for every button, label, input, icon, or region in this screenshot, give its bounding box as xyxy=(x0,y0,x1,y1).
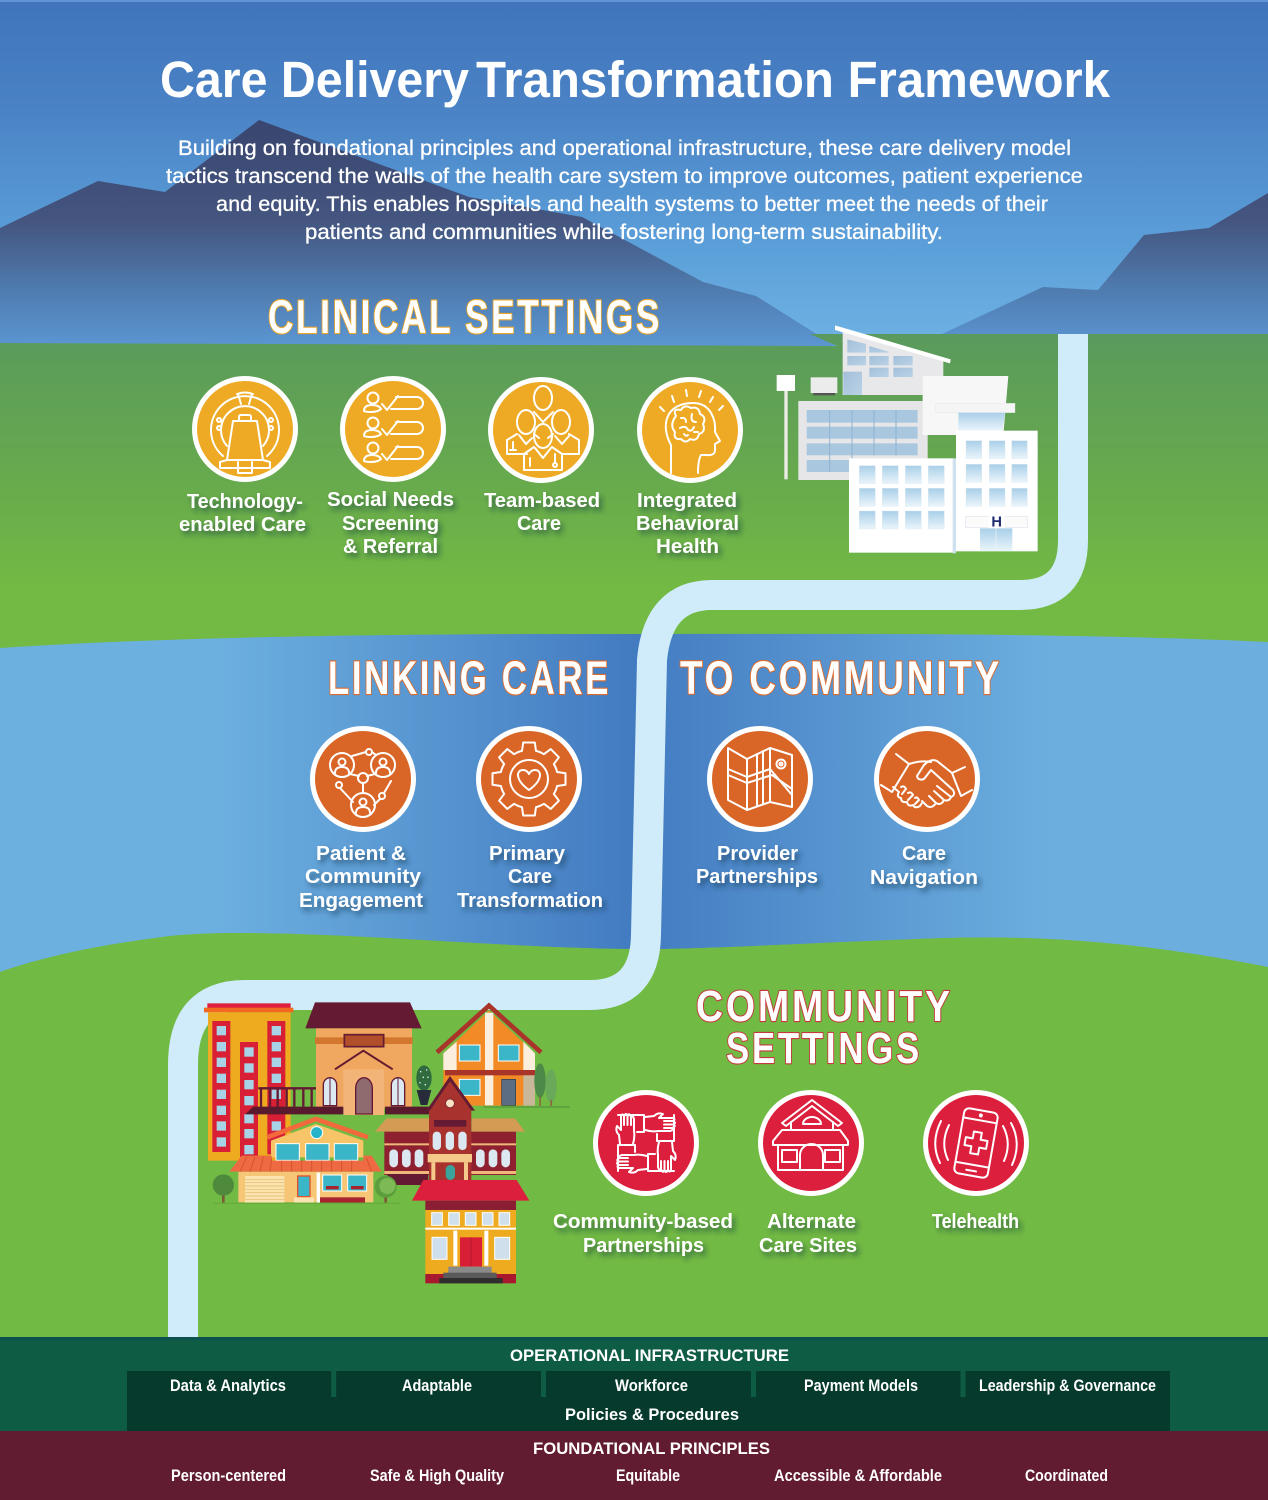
item: alternate care sites: Care Sites xyxy=(759,1235,857,1257)
item: patient and community engagement xyxy=(299,728,423,912)
item: social needs screening and referral: & Referral xyxy=(343,536,438,558)
item: alternate care sites xyxy=(759,1092,862,1257)
item: provider partnerships xyxy=(696,728,818,888)
panel: foundational principles xyxy=(0,1431,1268,1500)
panel: community settings items xyxy=(553,1092,1026,1257)
right mountains xyxy=(942,193,1268,334)
intro paragraph: tactics transcend the walls of the health care system to improve outcomes, patient experience xyxy=(166,165,1083,188)
item: integrated behavioral health: Behavioral xyxy=(636,513,739,535)
item: community-based partnerships: Partnerships xyxy=(583,1235,704,1257)
panel: linking care to community items xyxy=(299,728,978,912)
item: technology-enabled care: Technology- xyxy=(187,491,303,513)
title: Care Delivery xyxy=(160,51,470,108)
heading: community settings xyxy=(696,982,953,1073)
item: telehealth: Telehealth xyxy=(932,1211,1019,1233)
panel: operational infrastructure: Leadership & Governance xyxy=(979,1376,1156,1395)
item: patient and community engagement: Patient & xyxy=(316,843,406,865)
panel: foundational principles: Person-centered xyxy=(171,1466,286,1485)
title: Transformation Framework xyxy=(476,51,1111,108)
winding path xyxy=(183,334,1073,1338)
title xyxy=(160,51,1111,108)
item: patient and community engagement: Community xyxy=(305,866,422,888)
item: community-based partnerships: Community-based xyxy=(553,1211,733,1233)
upper green ground xyxy=(0,334,1268,660)
heading: community settings: SETTINGS xyxy=(726,1024,922,1073)
sky background xyxy=(0,0,1268,350)
panel: foundational principles: FOUNDATIONAL PRINCIPLES xyxy=(533,1439,770,1458)
item: integrated behavioral health: Integrated xyxy=(637,490,737,512)
left mountains xyxy=(0,120,837,347)
item: team-based care: Care xyxy=(517,513,561,535)
intro paragraph: and equity. This enables hospitals and health systems to better meet the needs of their xyxy=(216,193,1048,216)
blue river band xyxy=(0,634,1268,972)
item: primary care transformation: Primary xyxy=(489,843,566,865)
heading: linking care: LINKING CARE xyxy=(328,651,611,704)
panel: foundational principles: Safe & High Quality xyxy=(370,1466,504,1485)
item: community-based partnerships xyxy=(553,1092,733,1257)
item: primary care transformation: Transformation xyxy=(457,890,603,912)
item: provider partnerships: Partnerships xyxy=(696,866,818,888)
item: integrated behavioral health xyxy=(636,380,740,558)
item: integrated behavioral health: Health xyxy=(656,536,719,558)
item: social needs screening and referral: Social Needs xyxy=(327,489,454,511)
item: care navigation xyxy=(870,728,978,889)
panel: foundational principles: Accessible & Affordable xyxy=(774,1466,942,1485)
item: alternate care sites: Alternate xyxy=(767,1211,856,1233)
panel: foundational principles: Coordinated xyxy=(1025,1466,1108,1485)
item: care navigation: Navigation xyxy=(870,867,978,889)
heading: community settings: COMMUNITY xyxy=(696,982,953,1031)
intro paragraph: Building on foundational principles and operational infrastructure, these care delivery model xyxy=(178,137,1071,160)
item: social needs screening and referral: Screening xyxy=(342,513,439,535)
panel: operational infrastructure: Adaptable xyxy=(402,1376,472,1395)
panel: operational infrastructure: Workforce xyxy=(615,1376,688,1395)
item: technology-enabled care: enabled Care xyxy=(179,514,306,536)
item: social needs screening and referral xyxy=(327,378,454,558)
item: team-based care: Team-based xyxy=(484,490,600,512)
panel: operational infrastructure: OPERATIONAL INFRASTRUCTURE xyxy=(510,1346,789,1365)
item: primary care transformation xyxy=(457,728,603,912)
heading: to community: TO COMMUNITY xyxy=(680,651,1002,704)
item: technology-enabled care xyxy=(179,378,306,536)
town illustration xyxy=(204,1002,570,1283)
panel: operational infrastructure: Data & Analytics xyxy=(170,1376,286,1395)
panel: operational infrastructure: Policies & Procedures xyxy=(565,1405,739,1424)
panel: operational infrastructure xyxy=(0,1337,1268,1431)
item: patient and community engagement: Engagement xyxy=(299,890,423,912)
lower green ground xyxy=(0,933,1268,1340)
hospital illustration xyxy=(777,325,1038,553)
item: primary care transformation: Care xyxy=(508,866,552,888)
intro paragraph xyxy=(166,137,1083,244)
panel: operational infrastructure: Payment Models xyxy=(804,1376,918,1395)
hospital illustration: H xyxy=(991,515,1002,531)
item: care navigation: Care xyxy=(902,843,946,865)
item: provider partnerships: Provider xyxy=(717,843,798,865)
panel: foundational principles: Equitable xyxy=(616,1466,680,1485)
intro paragraph: patients and communities while fostering long-term sustainability. xyxy=(305,221,943,244)
heading: clinical settings: CLINICAL SETTINGS xyxy=(268,290,662,343)
item: team-based care xyxy=(484,380,600,535)
item: telehealth xyxy=(926,1092,1026,1233)
panel: clinical settings items xyxy=(179,378,740,558)
